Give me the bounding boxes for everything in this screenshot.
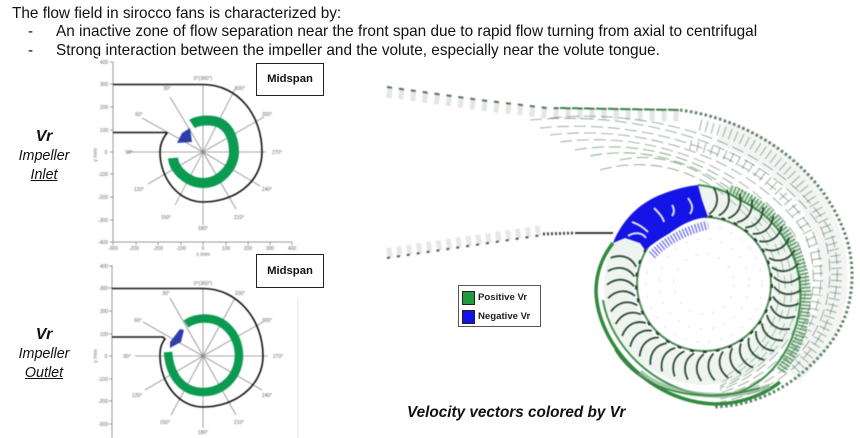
volute fine vectors (530, 116, 837, 402)
axis labels: -100 (98, 172, 108, 178)
axis labels: 120° (132, 393, 142, 399)
axes (110, 62, 292, 245)
legend text: positive: Positive Vr (478, 292, 527, 303)
impeller inner ring (637, 217, 771, 351)
label: Midspan outlet: Midspan (267, 265, 313, 277)
axis labels: 180° (198, 430, 208, 436)
volute outline (113, 84, 262, 202)
legend swatch: positive (462, 291, 475, 305)
axis labels: 0 (105, 354, 108, 360)
axis labels: 150° (160, 420, 170, 426)
axis labels: 200 (100, 105, 108, 111)
axis labels: 60° (135, 112, 143, 118)
axis labels: -300 (98, 422, 108, 428)
axis labels: y /mm (93, 148, 99, 162)
axis labels: 200 (100, 309, 108, 315)
chart: impeller outlet midspan (93, 264, 298, 438)
axis labels: 270° (272, 150, 282, 156)
axis labels (93, 60, 296, 258)
blue negative region (177, 128, 192, 143)
volute wash (720, 132, 835, 372)
label: Midspan inlet (256, 63, 324, 96)
axis labels: -200 (98, 399, 108, 405)
axis labels: x /mm (196, 252, 210, 258)
axis labels: -100 (98, 377, 108, 383)
radial lines (135, 289, 268, 428)
legend text: negative: Negative Vr (478, 311, 530, 322)
figure: velocity vectors (387, 87, 852, 407)
label: Vr impeller outlet: Impeller (19, 346, 69, 362)
label: Vr impeller outlet: Outlet (25, 365, 63, 381)
white chart backing (98, 56, 333, 438)
axis labels: 240° (262, 187, 272, 193)
axis labels: -200 (98, 195, 108, 201)
axis labels: 330° (235, 291, 245, 297)
green positive ring (173, 120, 234, 183)
radial lines (128, 85, 266, 225)
axis labels: 0 (202, 246, 205, 252)
impeller blades (607, 187, 801, 381)
axis labels: 180° (198, 226, 208, 232)
axis labels: -300 (98, 218, 108, 224)
label: Vr impeller inlet: Vr (36, 128, 52, 145)
blue negative region (613, 185, 708, 250)
green positive ring (168, 318, 239, 392)
label: Vr impeller inlet (19, 128, 70, 183)
inner ring dots (636, 216, 772, 352)
axis labels: 120° (134, 187, 144, 193)
axis labels: 300° (262, 318, 272, 324)
impeller ring wash (619, 200, 789, 370)
bullet: interaction: - (28, 42, 33, 59)
axis labels (93, 264, 283, 436)
axis labels: 210° (234, 215, 244, 221)
axis labels: -200 (153, 246, 163, 252)
inlet lower vector band (387, 230, 613, 258)
axis labels: 400 (100, 264, 108, 270)
axis labels: 300 (100, 82, 108, 88)
axis labels: -400 (98, 240, 108, 246)
blue blade highlights (628, 198, 692, 238)
intro text: The flow field in sirocco fans is characterized by: (12, 5, 341, 22)
axis labels: 200 (244, 246, 252, 252)
axis labels: 400 (288, 246, 296, 252)
label: Midspan inlet: Midspan (267, 73, 313, 85)
axis labels: 240° (262, 393, 272, 399)
axis labels: 90° (125, 150, 133, 156)
axis labels: 100 (100, 332, 108, 338)
label: Vr impeller inlet: Impeller (19, 148, 69, 164)
axis labels: 90° (123, 354, 131, 360)
axis labels: -300 (108, 246, 118, 252)
axis labels: 330° (235, 86, 245, 92)
axis labels: 100 (100, 128, 108, 134)
volute outer tooth edge (680, 110, 852, 407)
caption: Velocity vectors colored by Vr (407, 404, 626, 421)
volute slanted vectors (690, 125, 837, 370)
volute outline (112, 288, 263, 407)
legend swatch: negative (462, 310, 475, 324)
impeller outer green ring (596, 185, 806, 404)
axis labels: 0°(360°) (194, 281, 213, 287)
legend (458, 285, 541, 327)
axis labels: 0°(360°) (194, 76, 213, 82)
label: Midspan outlet (256, 254, 324, 288)
axis labels: -100 (176, 246, 186, 252)
blue negative region (170, 329, 184, 348)
axis labels: 210° (234, 420, 244, 426)
axis labels: 60° (134, 318, 142, 324)
axis labels: 300° (262, 112, 272, 118)
axis labels: y /mm (93, 349, 99, 363)
axis labels: 30° (163, 86, 171, 92)
label: Vr impeller inlet: Inlet (30, 167, 58, 183)
inlet upper vector band (387, 87, 680, 116)
inner faint vectors (646, 226, 762, 342)
bullet text: interaction: Strong interaction between the impeller and the volute, especially near the volute tongue. (56, 42, 660, 59)
axis labels: -200 (129, 246, 139, 252)
intro text (12, 5, 757, 59)
bullet: flow separation: - (28, 23, 33, 40)
axis labels: 0 (105, 150, 108, 156)
label: Vr impeller outlet (19, 326, 70, 381)
axis labels: 270° (273, 354, 283, 360)
axis labels: 150° (161, 215, 171, 221)
axis labels: 400 (100, 60, 108, 66)
axes (109, 265, 298, 438)
label: Vr impeller outlet: Vr (36, 326, 52, 343)
axis labels: 300 (100, 286, 108, 292)
bullet text: flow separation: An inactive zone of flow separation near the front span due to rapid flow turning from axial to centrifugal (56, 23, 757, 40)
axis labels: 100 (222, 246, 230, 252)
axis labels: 300 (266, 246, 274, 252)
axis labels: 30° (162, 291, 170, 297)
blue spikes (652, 225, 708, 255)
